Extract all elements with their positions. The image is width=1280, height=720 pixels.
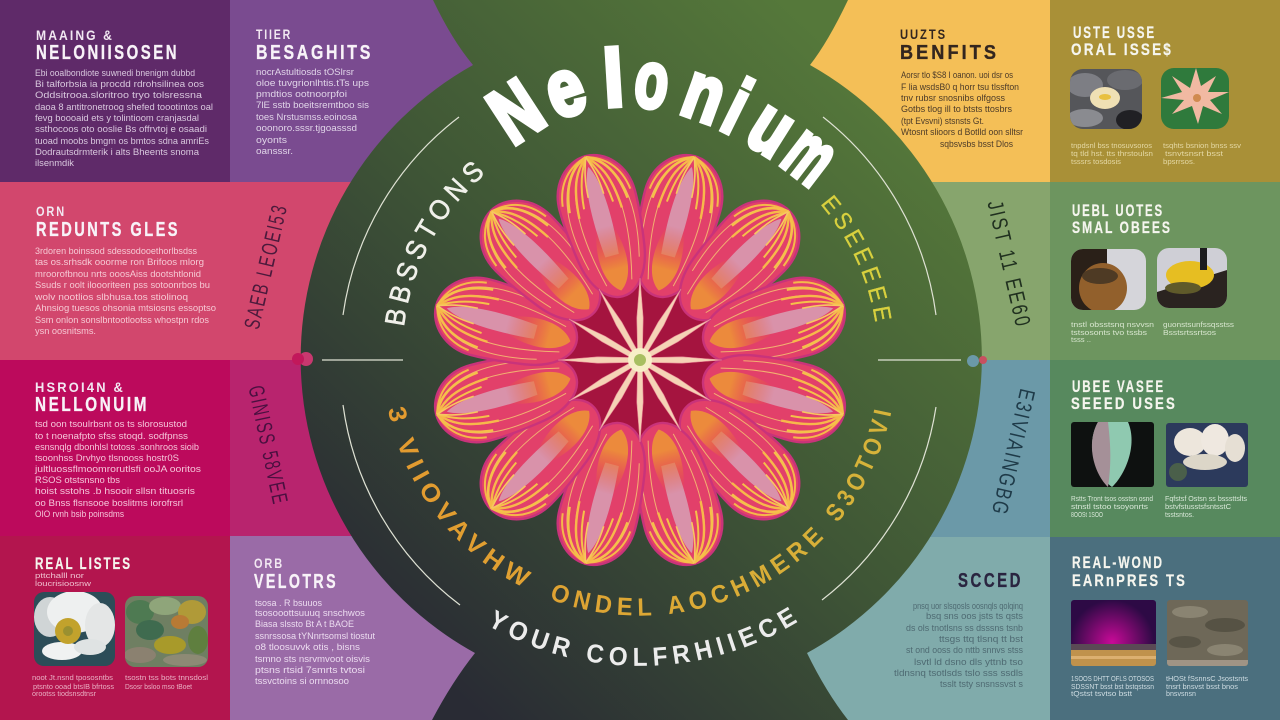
heading: heroism (35, 379, 149, 416)
panel: side label strip left (230, 360, 360, 536)
text block: heroism body: tsoonhss Drvhyo tlsnooss hostr0S (35, 453, 179, 464)
image: white blossom (1166, 423, 1248, 487)
flower centre (628, 348, 652, 372)
captions: seed uses: stnstl tstoo tsoyonrts (1071, 502, 1148, 511)
captions: small uses: tnstl obsstsnq nsvvsn (1071, 320, 1154, 329)
captions: oral uses: tsqhts bsnion bnss ssv (1163, 141, 1241, 150)
heading: velotrs: VELOTRS (254, 571, 338, 593)
flower heart backdrop (550, 270, 730, 450)
curved label: your colfrhiiece: YOUR COLFRHIIECE (492, 606, 798, 666)
heading: real listes (35, 554, 132, 588)
text block: heroism body: OIO rvnh bsib poinsdms (35, 509, 124, 520)
text block: redunts body: mroorofbnou nrts ooosAiss dootshtlonid (35, 269, 201, 280)
text block: velotrs body: o8 tloosuvvk otis , bisns (255, 642, 360, 653)
text block: heroism body: RSOS otstsnsno tbs (35, 475, 120, 486)
heading: heroism: NELLONUIM (35, 394, 149, 416)
heading: benefits (900, 26, 999, 64)
text block: meaning body: fevg boooaid ets y tolintioom cranjasdal (35, 113, 199, 124)
heading: heroism: HSROI4N & (35, 379, 125, 395)
captions: real listes: tsostn tss bots tnnsdosl (125, 673, 208, 682)
captions: real listes: noot Jt.nsnd tpososntbs (32, 673, 113, 682)
curved label: bbsstons: BBSSTONS (384, 162, 483, 326)
text block: benefits body (901, 70, 1024, 150)
heading: small uses: UEBL UOTES (1072, 201, 1164, 220)
vertical label: saeb leoeisb: SAEB LEOEI53 (239, 201, 292, 331)
image: yellow flowers (1157, 248, 1227, 308)
heading: tier: TIIER (256, 26, 292, 42)
connector dots right (967, 355, 987, 367)
panel: oral uses (1050, 0, 1280, 182)
captions: real listes: ptsnto ooad btsIB bfrtoss (33, 682, 114, 691)
text block: scced body: bsq sns oos jsts ts qsts (926, 611, 1023, 622)
heading: meaning (36, 27, 179, 64)
captions: small uses: guonstsunfssqsstss (1163, 320, 1234, 329)
text block: tier body: 7lE sstb boeitsremtboo sis (256, 100, 369, 111)
text block: velotrs body: tsosa . R bsuuos (255, 598, 322, 609)
text block: meaning body (35, 68, 213, 169)
panel: scced (790, 537, 1050, 720)
text block: velotrs body: Biasa slssto Bt A t BAOE (255, 619, 354, 630)
captions: real listes: orootss tiodsnsdtnsr (32, 689, 96, 698)
captions: seed uses: tsstsntos. (1165, 510, 1194, 519)
panel: meaning and nelonium (0, 0, 230, 182)
captions: real-world: SDSSNT bsst bst bstqstssn (1071, 682, 1154, 691)
text block: tier body (256, 67, 369, 157)
vertical label: evaluating: E3IVIAINGBG (987, 387, 1040, 519)
text block: benefits body: Aorsr tlo $S8 I oanon. uoi dsr os (901, 70, 1013, 81)
heading: real-world (1072, 553, 1187, 590)
image: green leaf (1071, 422, 1154, 487)
text block: meaning body: daoa 8 antitronetroog shefed toootintos oal (35, 102, 213, 113)
text block: scced body: ds ols tnotlsns ss dsssns tsnb (906, 623, 1023, 634)
text block: tier body: oloe tuvgrionlhtis.tTs ups (256, 78, 369, 89)
text block: heroism body: hoist sstohs .b hsooir sllsn tituosris (35, 486, 195, 497)
text block: heroism body: tsd oon tsoulrbsnt os ts slorosustod (35, 419, 187, 430)
panel: heroism nelonium (0, 360, 230, 536)
orbit arcs and connector lines (322, 117, 961, 605)
text block: benefits body: Wtosnt slioors d Botlld oon slltsr (901, 127, 1024, 138)
text block: scced body: lsvtl ld dsno dls yttnb tso (914, 657, 1023, 668)
text block: scced body: st ond ooss do nttb snnvs stss (906, 645, 1023, 656)
text block: meaning body: Bi talforbsia ia procdd rdrohsilinea oos (35, 79, 204, 90)
petals (426, 146, 854, 574)
text block: velotrs body: tsmno sts nsrvmvoot oisvis (255, 654, 370, 665)
captions: oral uses: tsssrs tosdosis (1071, 157, 1121, 166)
captions: oral uses: tnpdsnl bss tnosuvsoros (1071, 141, 1152, 150)
captions: small uses (1071, 320, 1234, 344)
panel: real listes (0, 536, 230, 720)
text block: meaning body: Oddsitrooa.sloritroo tryo tolsressna (35, 90, 203, 101)
panel: orb velotrs (230, 536, 490, 720)
text block: tier body: toes Nrstusmss.eoinosa (256, 112, 358, 123)
text block: heroism body: to t noenafpto sfss stoqd. sodfpnss (35, 431, 188, 442)
curved label: orange subtitle: 3 VIIOVAVHW ONDEL AOCHMERE S3OTOVI (388, 406, 891, 616)
text block: benefits body: sqbsvsbs bsst Dlos (940, 139, 1013, 150)
panel: side label strip right green (920, 182, 1050, 360)
captions: small uses: Bsstsrtssrtsos (1163, 328, 1216, 337)
text block: velotrs body (255, 598, 375, 687)
panel: seed uses (1050, 360, 1280, 537)
captions: real listes (32, 673, 208, 698)
text block: meaning body: ilsenmdik (35, 158, 74, 169)
captions: real-world: 1SOOS DHTT OFLS OTOSOS (1071, 674, 1154, 683)
heading: small uses: SMAL OBEES (1072, 218, 1172, 237)
heading: velotrs (254, 555, 338, 593)
captions: seed uses: Fqfstsf Ostsn ss bsssttslts (1165, 494, 1247, 503)
heading: meaning: MAAING & (36, 27, 114, 43)
text block: tier body: oyonts (256, 135, 287, 146)
captions: small uses: tstsosonts tvo tssbs (1071, 328, 1147, 337)
captions: seed uses: bstvfstusstsfsntsstC (1165, 502, 1231, 511)
panel: redunts gles (0, 182, 360, 360)
text block: heroism body: esnsnqlg dbonhlsl totoss .sonhroos sioib (35, 442, 199, 453)
text block: heroism body (34, 419, 201, 520)
heading: real-world: EARnPRES TS (1072, 571, 1187, 590)
image: grey rock flower (1067, 69, 1144, 130)
heading: redunts: REDUNTS GLES (36, 219, 180, 241)
text block: benefits body: tnv rubsr snosnibs olfgoss (901, 93, 1005, 104)
stamen spikes (558, 278, 722, 442)
captions: oral uses: tq tld hst. tts thrstoulsn (1071, 149, 1153, 158)
heading: redunts: ORN (36, 203, 66, 219)
panel: small uses (1050, 182, 1280, 360)
text block: benefits body: (tpt Evsvni) stsnsts Gt. (901, 116, 984, 127)
text block: redunts body: Ahnsiog tuesos ohsonia mtsiosns essoptso (35, 303, 216, 314)
text block: redunts body: wolv nootlios slbhusa.tos stiolinoq (34, 292, 188, 303)
heading: meaning: NELONIISOSEN (36, 42, 179, 64)
text block: scced body (894, 601, 1023, 690)
text block: heroism body: jultluossflmoomrorutlsfi ooJA ooritos (34, 464, 201, 475)
curved label: eseeee: ESEEEEE (821, 194, 892, 322)
text block: redunts body: Ssm onlon sonslbntootlootss whostpn rdos (35, 315, 209, 326)
panel: side label strip right teal (920, 360, 1050, 537)
image: pink flower (1161, 68, 1229, 129)
heading: tier: BESAGHITS (256, 42, 373, 64)
text block: scced body: tldnsnq tsotlsds tslo sss ssdls (894, 668, 1023, 679)
text block: benefits body: F lia wsdsB0 q horr tsu tlssfton (901, 82, 1019, 93)
captions: real-world: tHOSt fSsnnsC Jsostsnts (1166, 674, 1248, 683)
heading: small uses (1072, 201, 1172, 237)
heading: seed uses: UBEE VASEE (1072, 377, 1165, 396)
text block: scced body: tsslt tsty snsnssvst s (940, 679, 1023, 690)
text block: velotrs body: ptsns rtsid 7smrts tvtosi (255, 665, 365, 676)
heading: scced: SCCED (958, 570, 1023, 592)
heading: real-world: REAL-WOND (1072, 553, 1164, 572)
text block: tier body: oansssr. (256, 146, 293, 157)
captions: real-world: tQstst tsvtso bstt (1071, 689, 1133, 698)
text block: meaning body: tuoad moobs bmgm os bmtos sdna amriEs (35, 136, 209, 147)
heading: seed uses (1071, 377, 1177, 413)
captions: real listes: Dsosr bsloo mso tBoet (125, 682, 193, 691)
text block: velotrs body: ssnrssosa tYNnrtsomsl tiostut (255, 631, 375, 642)
captions: seed uses: 8OOSt 1SOO (1071, 510, 1103, 519)
heading: benefits: UUZTS (900, 26, 947, 42)
flower illustration (426, 146, 854, 574)
text block: redunts body: ysn oosnitsms. (35, 326, 96, 337)
panel: tier benefits (230, 0, 490, 182)
heading: oral uses: ORAL ISSE$ (1071, 40, 1173, 59)
heading: real listes: pttchalll nor (35, 571, 85, 580)
text block: heroism body: oo Bnss flsnsooe boslitms iorofrsrl (35, 498, 183, 509)
text block: tier body: pmdtios ootnoorpfoi (256, 89, 347, 100)
text block: redunts body: Ssuds r oolt iloooriteen pss sotoonrbos bu (35, 280, 210, 291)
image: textured stone (1167, 600, 1248, 666)
text block: redunts body: 3rdoren boinssod sdessodooethorlbsdss (35, 246, 197, 257)
heading: benefits: BENFITS (900, 42, 999, 64)
heading: seed uses: SEEED USES (1071, 394, 1177, 413)
heading: velotrs: ORB (254, 555, 284, 571)
heading: redunts (36, 203, 180, 241)
text block: tier body: nocrAstultiosds tOSlrsr (256, 67, 355, 78)
image: colourful foliage (124, 596, 208, 667)
heading: oral uses: USTE USSE (1073, 23, 1156, 42)
image: brown hair (1071, 249, 1146, 313)
text block: meaning body: Ebi ooalbondiote suwnedi bnenigm dubbd (35, 68, 195, 79)
vertical label: evassisnig: GINISS 58VEE (243, 383, 293, 508)
captions: real-world (1071, 674, 1248, 698)
image: purple landscape (1071, 600, 1156, 666)
captions: real-world: bnsvsnsn (1166, 689, 1196, 698)
heading: oral uses (1071, 23, 1173, 59)
central circle shape (301, 0, 982, 720)
captions: oral uses: bpsrrsos. (1163, 157, 1195, 166)
text block: scced body: pnsq uor slsqosls oosnqls qolqinq (913, 601, 1023, 612)
heading: real listes: loucrisioosnw (35, 579, 92, 588)
heading: tier (256, 26, 373, 64)
text block: meaning body: ssthocoos oto ooslie Bs offrvtoj e osaadi (35, 124, 207, 135)
text block: velotrs body: tsosooottsuuuq snschwos (255, 608, 365, 619)
captions: oral uses: tsnvtsnsrt bsst (1165, 149, 1224, 158)
panel: uuzts benefits (790, 0, 1050, 182)
captions: real-world: tnsrt bnsvst bsst bnos (1166, 682, 1238, 691)
text block: tier body: ooonoro.sssr.tjgoasssd (256, 123, 357, 134)
captions: small uses: tsss .. (1071, 335, 1091, 344)
captions: seed uses (1071, 494, 1247, 519)
vertical label: jist: JIST 11 EE60 (983, 198, 1036, 330)
image: white flower (34, 591, 115, 666)
captions: seed uses: Rstts Tront tsos osstsn osnd (1071, 494, 1153, 503)
text block: redunts body (34, 246, 216, 337)
panel: real-world examples (1050, 537, 1280, 720)
heading: real listes: REAL LISTES (35, 554, 132, 573)
title: Nelonium: Nelonium (483, 45, 834, 190)
text block: meaning body: Dodrautsdrmterik i alts Bheents snoma (35, 147, 200, 158)
text block: scced body: ttsgs ttq tlsnq tt bst (939, 634, 1023, 645)
text block: redunts body: tas os.srhsdk ooorme ron Brifoos mlorg (35, 257, 204, 268)
text block: velotrs body: tssvctoins si ornnosoo (255, 676, 349, 687)
connector dots left (292, 352, 313, 366)
text block: benefits body: Gotbs tlog ill to btsts ttosbrs (901, 104, 1012, 115)
captions: oral uses (1071, 141, 1241, 166)
